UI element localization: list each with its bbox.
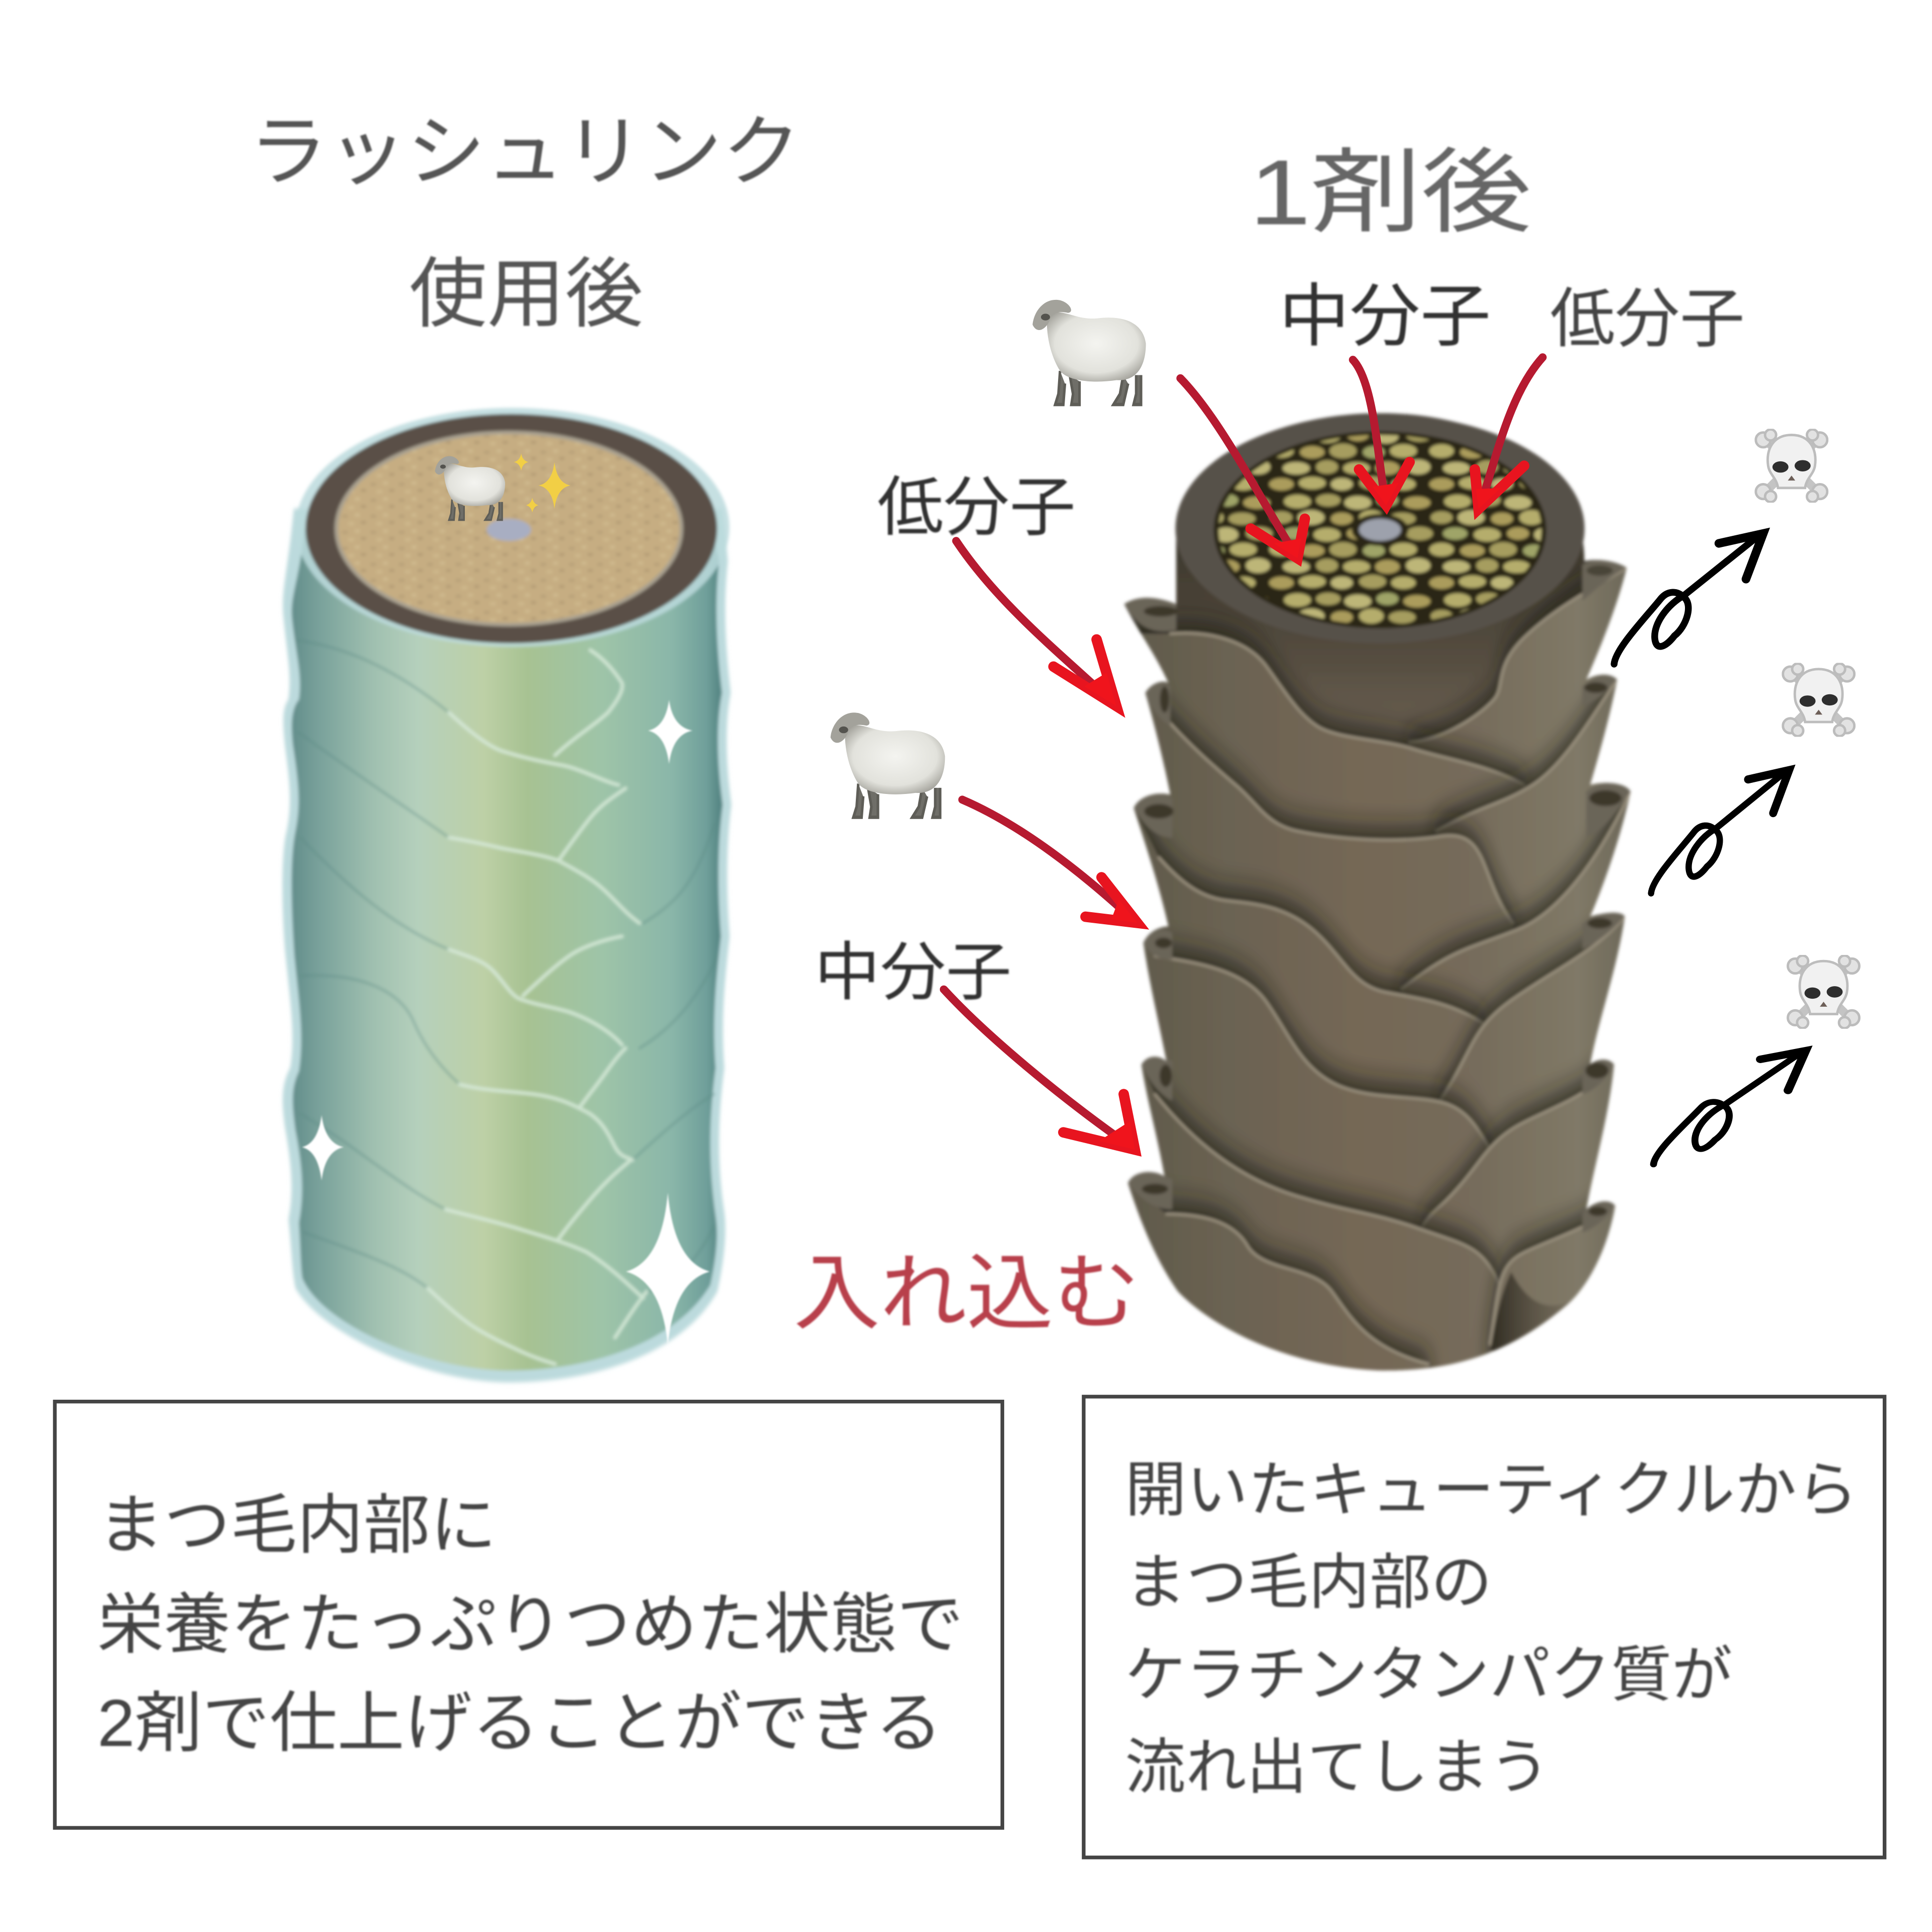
heading: 1剤後: 1剤後 [1249, 141, 1532, 244]
panel: left explanation [55, 1402, 1002, 1828]
icon: skull 1 [1756, 429, 1827, 502]
arrow: 低分子 into scales [956, 541, 1116, 706]
heading: ラッシュリンク使用後: ラッシュリンク [249, 108, 801, 195]
panel: right explanation [1084, 1397, 1885, 1858]
arrow: sheep into core [1180, 378, 1305, 558]
heading: ラッシュリンク使用後: 使用後 [409, 252, 643, 337]
label: 入れ込む: 入れ込む [793, 1247, 1140, 1340]
icon: skull 2 [1783, 664, 1855, 736]
scale layers [1128, 567, 1630, 1369]
right explanation text: 開いたキューティクルから [1125, 1456, 1858, 1523]
icon: skull 3 [1788, 955, 1860, 1028]
icon: small sheep on cross-section [435, 456, 505, 520]
icon: sheep top [1032, 300, 1146, 405]
label: 低分子 top: 低分子 [1550, 282, 1745, 355]
scale rims [1124, 560, 1631, 1232]
right explanation text: 流れ出てしまう [1125, 1733, 1550, 1801]
escaping arrow 1 [1614, 533, 1763, 664]
right explanation text: まつ毛内部の [1125, 1549, 1492, 1616]
left explanation text: まつ毛内部に [97, 1489, 497, 1562]
icon: yellow sparkles [514, 453, 571, 513]
heading: ラッシュリンク使用後 [249, 108, 801, 337]
left eyelash cylinder illustration [282, 408, 732, 1383]
arrow: sheep into scales [962, 799, 1137, 923]
left explanation text [97, 1489, 963, 1760]
right explanation text [1125, 1456, 1858, 1801]
cylinder body [292, 528, 722, 1371]
label: 中分子 left: 中分子 [815, 936, 1012, 1008]
right explanation text: ケラチンタンパク質が [1125, 1641, 1732, 1709]
cylinder top cross-section [296, 408, 730, 647]
label: 低分子 left: 低分子 [877, 471, 1076, 544]
label: 中分子 top: 中分子 [1279, 278, 1491, 355]
arrow: 低分子 into core [1475, 357, 1543, 509]
cylinder halo outline [282, 509, 732, 1383]
escaping arrow 3 [1654, 1051, 1806, 1164]
escaping arrow 2 [1651, 770, 1789, 894]
arrow: 中分子 into scales [944, 990, 1135, 1150]
left explanation text: 栄養をたっぷりつめた状態で [97, 1587, 963, 1662]
hair core cross-section [1175, 414, 1584, 643]
icon: white sparkles on cylinder [302, 700, 710, 1345]
arrow: 中分子 into core [1353, 360, 1410, 505]
right eyelash scales illustration [1122, 411, 1633, 1374]
left explanation text: 2剤で仕上げることができる [97, 1686, 942, 1760]
core spot [487, 519, 531, 541]
icon: sheep left [831, 712, 945, 817]
